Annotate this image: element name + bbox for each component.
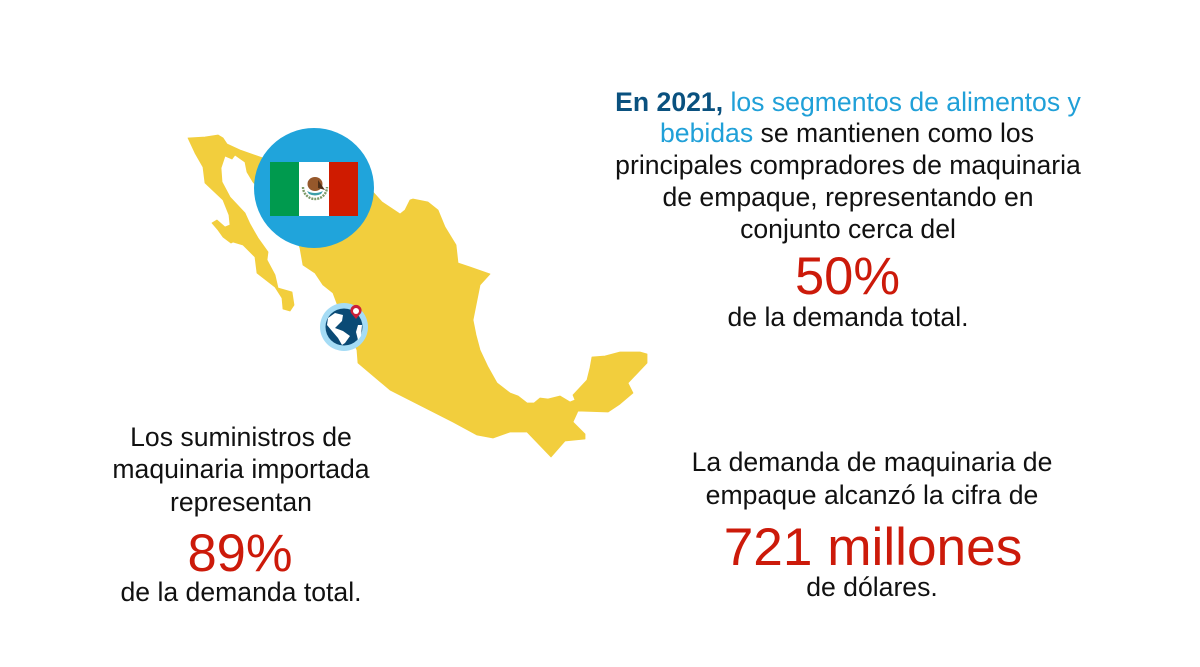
text block: total demand: empaque alcanzó la cifra de — [706, 480, 1038, 510]
stat: 721 millones: 721 millones — [724, 518, 1022, 577]
text block: food and beverage segments: de empaque, representando en — [662, 182, 1034, 212]
text block: imported machinery: Los suministros de — [130, 422, 352, 452]
text block: total demand — [692, 447, 1052, 602]
stat: 50%: 50% — [795, 247, 900, 306]
text block: food and beverage segments: principales compradores de maquinaria — [615, 150, 1081, 180]
globe icon — [320, 303, 368, 351]
stat: 89%: 89% — [187, 524, 293, 583]
text block: imported machinery — [112, 422, 370, 607]
text block: food and beverage segments: conjunto cerca del — [740, 214, 956, 244]
blue circle — [254, 128, 374, 248]
text block: imported machinery: de la demanda total. — [120, 577, 362, 607]
text block: food and beverage segments — [615, 87, 1082, 332]
text block: imported machinery: maquinaria importada — [112, 454, 370, 484]
coat of arms — [303, 177, 327, 199]
globe ring — [320, 303, 368, 351]
map pin — [350, 305, 362, 319]
text block: food and beverage segments: bebidas se mantienen como los — [660, 118, 1034, 148]
text block: imported machinery: representan — [170, 487, 312, 517]
text block: total demand: de dólares. — [806, 572, 938, 602]
Mexican flag — [270, 162, 358, 216]
text block: total demand: La demanda de maquinaria de — [692, 447, 1052, 477]
map: Baja California and mainland — [188, 135, 647, 457]
globe continents — [327, 313, 362, 345]
text block: food and beverage segments: de la demanda total. — [728, 302, 968, 332]
intro line: En 2021, los segmentos de alimentos y — [615, 87, 1082, 117]
flag badge — [254, 128, 374, 248]
map of Mexico — [188, 135, 647, 457]
